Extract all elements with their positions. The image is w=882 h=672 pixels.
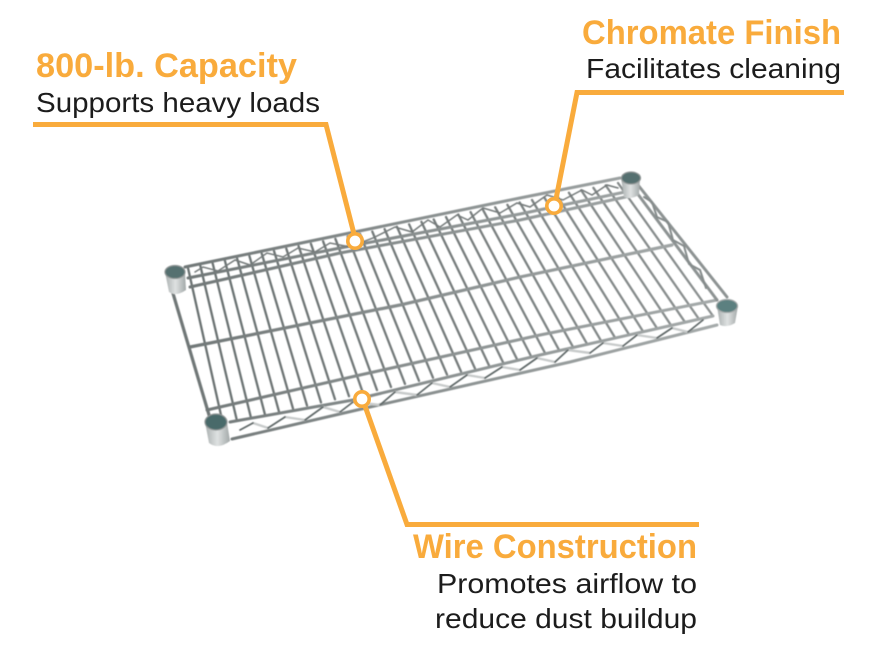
left side frame [172,290,212,425]
callout: wire construction [355,392,699,634]
text: facilitates cleaning: Facilitates cleaning [586,53,841,84]
back rails [185,178,630,287]
front rails [207,300,717,439]
post: front left [205,414,230,446]
post: front right [716,300,738,326]
heading: wire construction: Wire Construction [413,528,697,566]
wire shelf [165,172,738,446]
heading: chromate finish: Chromate Finish [582,14,841,52]
middle support bar [190,245,672,347]
leader line and marker [547,92,844,213]
callout: 800-lb capacity [33,47,362,248]
text: reduce dust buildup: reduce dust buildup [435,603,697,634]
post: back right [621,172,640,198]
leader line and marker [355,392,699,524]
callout: chromate finish [547,14,844,213]
text: promotes airflow: Promotes airflow to [437,568,697,599]
right side frame [637,185,727,300]
shelf decking wires [188,183,713,424]
post: back left [165,266,186,294]
heading: 800-lb capacity: 800-lb. Capacity [36,47,297,85]
text: supports heavy loads: Supports heavy loads [36,87,320,118]
front zigzag wire [240,320,703,430]
leader line and marker [33,124,362,248]
back zigzag wire [195,185,618,272]
